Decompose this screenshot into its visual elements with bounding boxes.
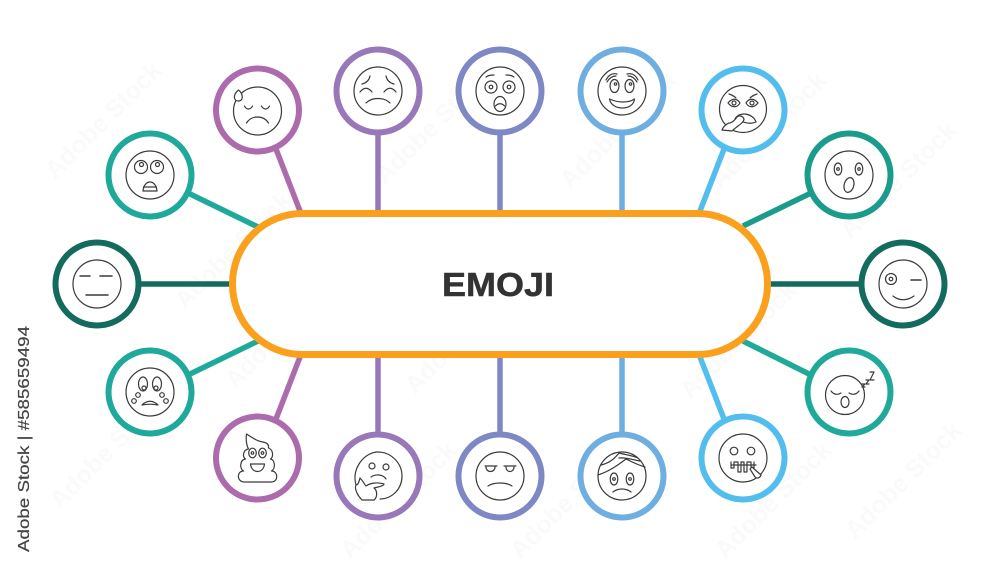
icon: head bandage face — [598, 452, 646, 500]
ring — [808, 134, 890, 216]
ring — [702, 68, 784, 152]
title: EMOJI — [442, 266, 554, 303]
icon: sleeping face with zzz — [826, 372, 874, 414]
ring — [458, 434, 542, 518]
connector — [743, 341, 811, 375]
ring — [702, 416, 784, 500]
node: surprised face right — [743, 134, 890, 226]
icon: sad sweat face — [234, 87, 282, 135]
watermark pattern: Adobe Stock — [369, 61, 497, 189]
icon: hushed face — [825, 151, 873, 199]
node: weary face — [336, 50, 420, 211]
node: crying face — [108, 341, 258, 434]
watermark pattern: Adobe Stock — [834, 116, 962, 244]
connector — [188, 193, 258, 227]
watermark pattern: Adobe Stock — [44, 386, 172, 514]
icon: eyes up face — [126, 151, 174, 199]
node: happy raised brows face — [580, 50, 664, 211]
watermark pattern: Adobe Stock — [549, 226, 677, 354]
watermark pattern: Adobe Stock — [709, 436, 837, 564]
icon: flat brow face — [476, 452, 524, 500]
node: sleeping face — [743, 341, 890, 434]
ring — [862, 242, 944, 326]
node: rolling eyes face — [108, 134, 258, 227]
connector — [375, 134, 381, 211]
watermark pattern: Adobe Stock — [504, 436, 632, 564]
connector — [375, 357, 381, 433]
icon: smiling face with raised brows — [598, 67, 646, 115]
icon: zipped mouth face — [719, 434, 767, 482]
node: thinking face — [336, 357, 420, 518]
ring — [108, 350, 192, 434]
icon: weary face — [354, 67, 402, 115]
watermark pattern: Adobe Stock — [554, 66, 682, 194]
node: bandaged face — [580, 357, 664, 518]
connector — [700, 149, 724, 211]
watermark pattern: Adobe Stock — [399, 271, 527, 399]
node: unamused brows face — [458, 357, 542, 518]
connector — [188, 341, 258, 375]
ring — [458, 50, 542, 132]
stock id caption: Adobe Stock | #585659494 — [16, 326, 33, 552]
watermark pattern: Adobe Stock — [169, 186, 297, 314]
icon: expressionless face — [73, 260, 121, 308]
connector — [140, 281, 232, 287]
connector — [619, 134, 625, 211]
central pill — [232, 214, 768, 354]
ring — [336, 434, 420, 518]
ring — [216, 68, 299, 152]
node: shocked face — [458, 50, 542, 211]
watermark pattern: Adobe Stock — [334, 436, 462, 564]
connector — [276, 357, 300, 419]
ring — [56, 242, 138, 326]
icon: wink face — [879, 260, 927, 308]
ring — [580, 434, 664, 518]
node: pile of poo — [216, 357, 300, 500]
icon: astonished face — [476, 67, 524, 115]
icon: smiling poo — [238, 434, 277, 482]
watermark pattern: Adobe Stock — [704, 66, 832, 194]
watermark pattern: Adobe Stock — [219, 266, 347, 394]
node: sweat drop face — [216, 68, 300, 211]
ring — [808, 350, 890, 434]
icon: thinking face — [355, 452, 402, 500]
connector — [619, 357, 625, 433]
connector — [768, 281, 860, 287]
watermark pattern: Adobe Stock — [674, 276, 802, 404]
node: winking face — [768, 242, 944, 326]
watermark pattern: Adobe Stock — [839, 416, 967, 544]
connector — [743, 193, 811, 226]
node: vomiting face — [700, 68, 784, 211]
ring — [108, 134, 192, 216]
connector — [497, 134, 503, 211]
connector — [700, 357, 724, 419]
ring — [336, 50, 420, 132]
ring — [216, 416, 299, 500]
watermark pattern: Adobe Stock — [39, 56, 167, 184]
node: neutral face, left — [56, 242, 232, 326]
icon: nauseated tongue face — [720, 86, 766, 132]
icon: crying face with tears — [126, 368, 174, 416]
ring — [580, 50, 664, 132]
node: zipper mouth face — [700, 357, 784, 500]
connector — [276, 149, 300, 211]
connector — [497, 357, 503, 433]
